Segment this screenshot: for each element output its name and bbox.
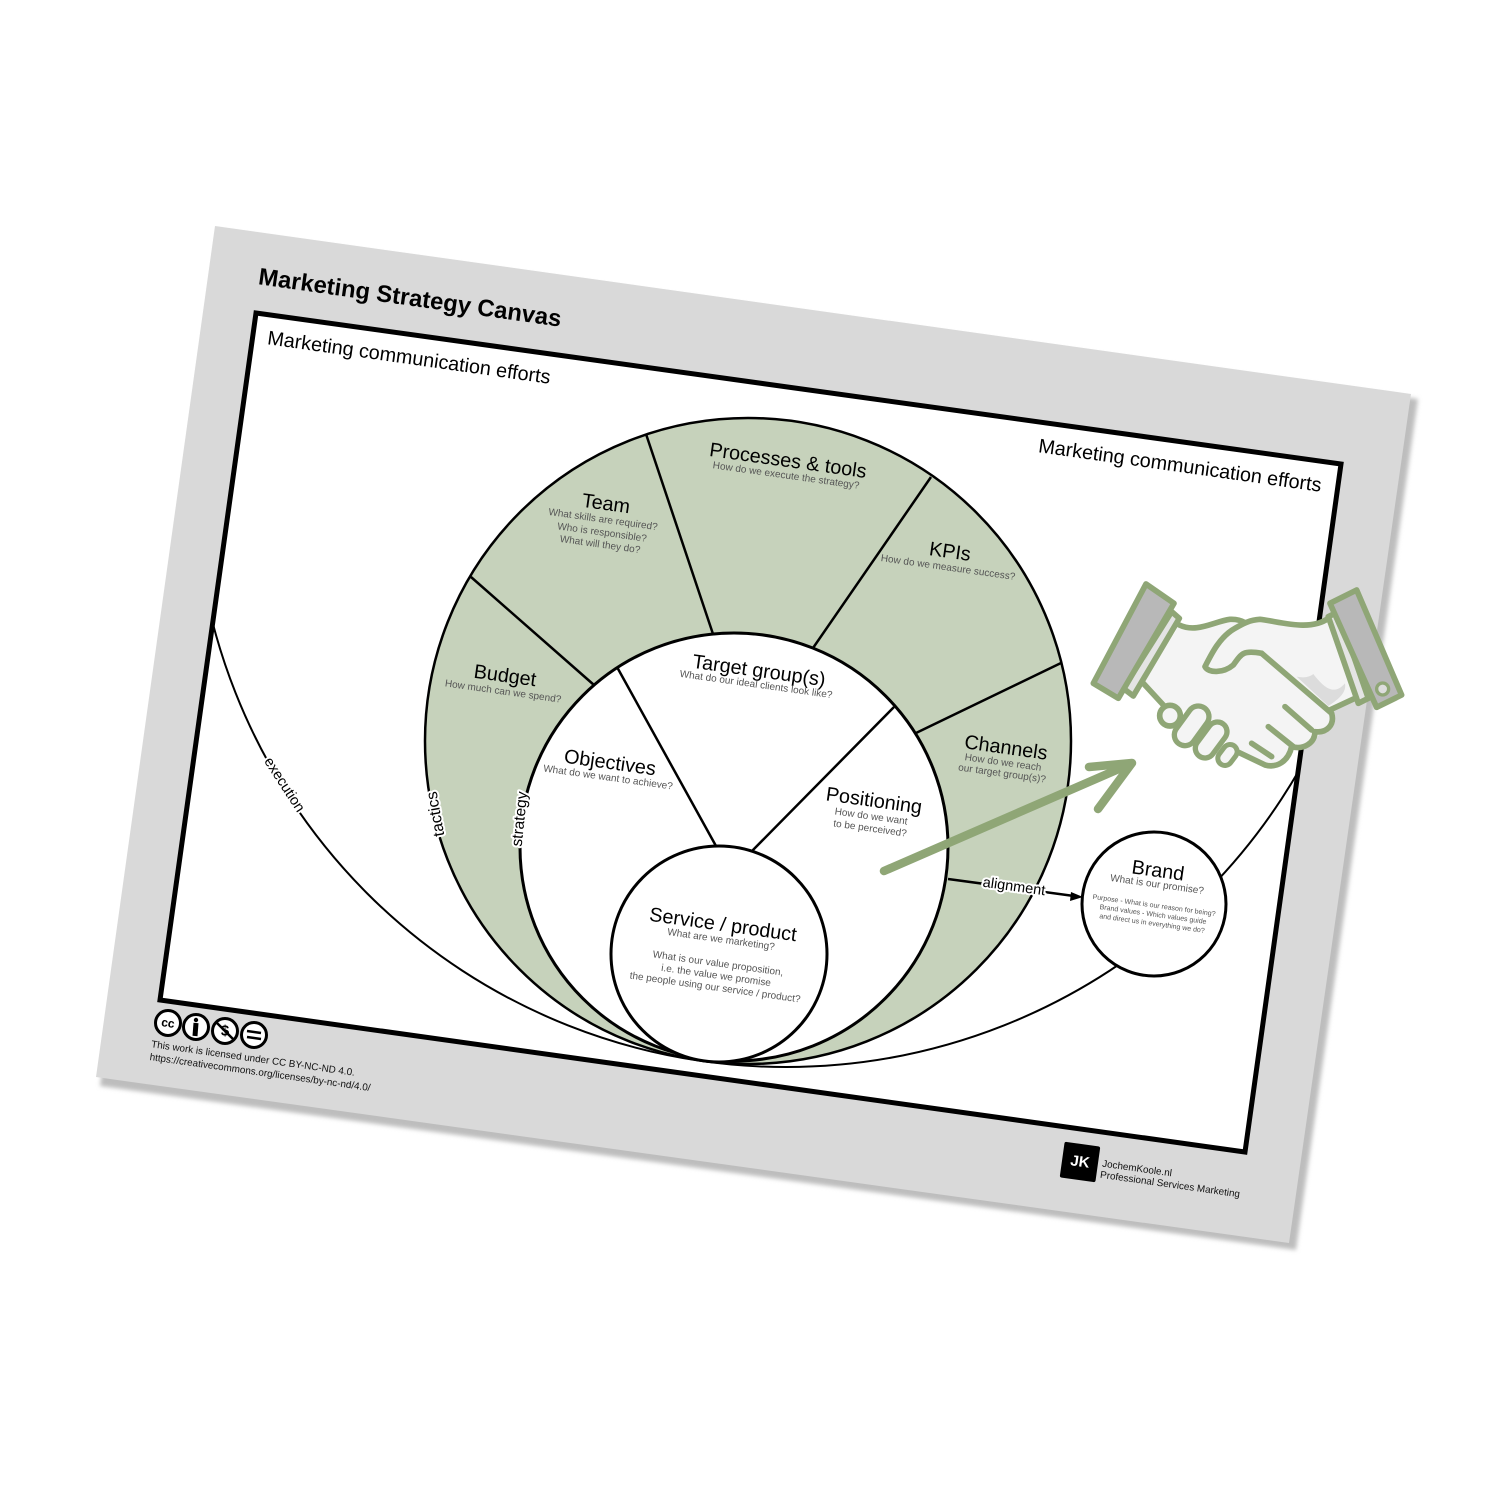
paper sheet (96, 226, 1411, 1243)
brand circle: and direct us in everything we do? (1099, 913, 1205, 935)
segment: channels (957, 731, 1049, 786)
green growth arrow (884, 763, 1132, 871)
strategy dividers (617, 667, 894, 852)
segment: service product: i.e. the value we promise (660, 963, 772, 989)
icon: attribution (184, 1014, 208, 1040)
service product circle (611, 846, 827, 1062)
brand circle: Brand values - Which values guide (1099, 904, 1207, 926)
alignment arrow: alignment (982, 875, 1046, 899)
segment: channels: our target group(s)? (957, 762, 1047, 786)
left stripe cuff (1123, 612, 1179, 696)
label: marketing communication efforts left: Marketing communication efforts (266, 327, 552, 389)
segment: positioning: How do we want (834, 806, 908, 828)
segment: team (548, 490, 659, 556)
segment: budget: Budget (472, 661, 538, 691)
canvas frame (160, 313, 1341, 1152)
brand circle: What is our promise? (1109, 873, 1205, 897)
alignment arrow (948, 875, 1083, 901)
segment: kpis (880, 538, 1016, 583)
segment: processes and tools: Processes & tools (708, 439, 868, 483)
brand circle (1082, 832, 1226, 976)
segment: channels: Channels (963, 731, 1049, 765)
segment: service product: the people using our service / product? (629, 971, 802, 1005)
license icons (156, 1010, 266, 1048)
segment: team: Team (581, 490, 631, 518)
brand circle: Purpose - What is our reason for being? (1092, 894, 1216, 918)
segment: positioning (825, 783, 923, 840)
left hand top line (1143, 619, 1245, 705)
segment: objectives: What do we want to achieve? (543, 763, 674, 793)
label: marketing communication efforts right: Marketing communication efforts (1037, 435, 1323, 497)
palm shadow (1297, 674, 1345, 706)
segment: target groups: Target group(s) (691, 651, 827, 691)
icon: handshake (1093, 584, 1402, 767)
thumb (1205, 618, 1328, 671)
tactics ring (425, 418, 1071, 1064)
finger creases (1252, 707, 1312, 757)
right hand fingers (1239, 653, 1355, 766)
hand fill (1143, 618, 1355, 767)
title: Marketing Strategy Canvas (257, 263, 563, 333)
segment: kpis: How do we measure success? (880, 553, 1016, 583)
icon: non commercial: $ (221, 1022, 230, 1040)
segment: channels: How do we reach (964, 752, 1042, 774)
license text: This work is licensed under CC BY-NC-ND 4.0. (151, 1039, 355, 1079)
curve label: execution: execution (260, 755, 308, 815)
logo: JK (1060, 1142, 1100, 1182)
strategy circle (520, 633, 948, 1061)
logo text: JochemKoole.nl (1101, 1159, 1173, 1179)
segment: service product: What is our value proposition, (652, 949, 784, 979)
segment: kpis: KPIs (928, 538, 972, 566)
execution curve (214, 626, 1296, 1068)
segment: budget: How much can we spend? (444, 678, 562, 706)
segment: target groups: What do our ideal clients look like? (679, 669, 833, 701)
segment dividers (471, 434, 1061, 733)
left cuff (1093, 584, 1174, 698)
right stripe cuff (1328, 612, 1368, 703)
segment: service product (629, 904, 802, 1005)
curve label: strategy: strategy (509, 790, 531, 847)
segment: service product: Service / product (648, 904, 799, 946)
segment: objectives: Objectives (563, 746, 657, 780)
segment: service product: What are we marketing? (667, 927, 776, 953)
segment: budget (444, 661, 562, 706)
segment: positioning: to be perceived? (833, 818, 908, 840)
logo text: Professional Services Marketing (1099, 1170, 1241, 1200)
icon: cc: cc (160, 1015, 176, 1031)
segment: team: Who is responsible? (557, 521, 648, 545)
right cuff (1330, 590, 1402, 707)
segment: team: What will they do? (559, 534, 641, 556)
segment: objectives (543, 746, 674, 793)
paper shadow (100, 231, 1418, 1250)
segment: team: What skills are required? (548, 507, 659, 533)
license text: https://creativecommons.org/licenses/by-nc-nd/4.0/ (149, 1052, 371, 1094)
cuff button (1377, 683, 1389, 695)
brand circle: Brand (1130, 856, 1186, 886)
left fingers (1160, 705, 1230, 758)
icon: no derivatives (242, 1022, 266, 1048)
curve label: tactics: tactics (424, 790, 448, 838)
segment: processes and tools: How do we execute the strategy? (712, 460, 860, 492)
logo: JK: JK (1069, 1152, 1091, 1172)
segment: positioning: Positioning (825, 783, 923, 819)
